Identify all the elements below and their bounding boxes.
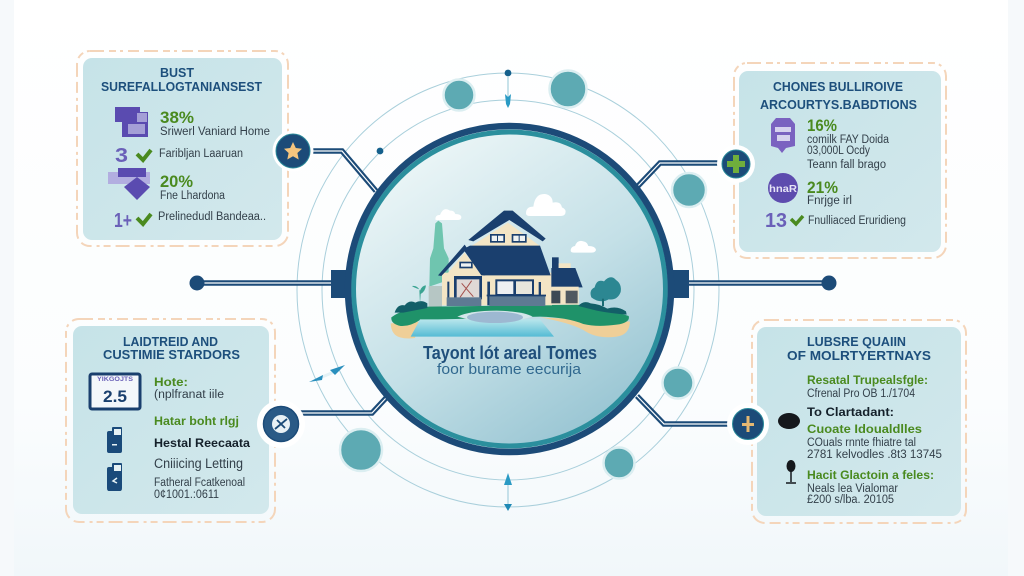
connector: bottom-right panel to hub: [637, 396, 731, 424]
icon: monitor with 2.5: 2.5: [103, 387, 127, 406]
text: listing details: Fatheral Fcatkenoal: [154, 477, 245, 489]
central subtitle: foor burame eecurija: [437, 361, 582, 378]
panel: top right: [734, 63, 946, 258]
heading: [760, 80, 917, 112]
garage: [551, 257, 583, 305]
panel: bottom left: [66, 319, 275, 522]
orbit node: teal circle bottom right: [604, 448, 634, 478]
list row: 3 with check: 3: [115, 145, 128, 167]
stat: 20%: 20%: [160, 172, 193, 191]
text: third item: [807, 468, 934, 506]
icon: monitor with 2.5: [90, 374, 140, 409]
list row: 3 with check: [115, 145, 243, 167]
stat: 16%: comilk FAY Doida: [807, 134, 890, 146]
front door window: [447, 276, 490, 305]
heading: ARCOURTYS.BABDTIONS: [760, 98, 917, 112]
bushes: [395, 301, 627, 315]
text: third item: Neals lea Vialomar: [807, 483, 898, 495]
central title: Tayont lót areal Tomes: [423, 343, 597, 363]
icon: purple shield: [771, 118, 795, 153]
dormer windows: [459, 234, 527, 268]
cloud left: [435, 209, 461, 220]
orbit node: teal circle right: [672, 173, 706, 207]
icon: black oval: [778, 413, 800, 429]
list row: 13 with check: Fnulliaced Eruridieng: [808, 215, 906, 227]
list row: 13 with check: 13: [765, 210, 787, 232]
text: bold label: To Clartadant:: [807, 405, 894, 419]
list row: 1+ with check: [114, 210, 266, 232]
text: third item: £200 s/lba. 20105: [807, 494, 894, 506]
text: listing details: [154, 456, 245, 501]
water: [411, 319, 554, 337]
text: first item: Cfrenal Pro OB 1./1704: [807, 388, 916, 400]
heading: OF MOLRTYERTNAYS: [787, 349, 931, 363]
pond: [457, 311, 533, 323]
orbit node: teal circle top right: [550, 70, 586, 108]
text: second item: Cuoate Idoualdlles: [807, 422, 922, 436]
list row: 3 with check: Faribljan Laaruan: [159, 148, 243, 160]
icon: green plus node: [717, 145, 755, 183]
icon: purple circle badge: [768, 173, 798, 203]
tree: [591, 277, 621, 306]
plant: [412, 285, 426, 304]
central hub disc: [348, 126, 671, 452]
heading: LUBSRE QUAIIN: [807, 335, 906, 349]
icon: star node: [272, 130, 314, 172]
icon: monitor with 2.5: YIKGOJTS: [97, 377, 133, 383]
orbit node: teal circle bottom left: [340, 429, 382, 471]
text: third item: Hacit Glactoin a feles:: [807, 468, 934, 482]
icon: microphone: [786, 460, 796, 483]
orbit node: teal circle top left: [444, 80, 474, 110]
text: listing details: Cniiicing Letting: [154, 456, 243, 471]
text: green heading: Hatar boht rlgj: [154, 414, 239, 428]
text: second item: [807, 422, 942, 461]
stat: 21%: [807, 178, 852, 207]
icon: navy device two: [107, 463, 122, 491]
stat: 38%: [160, 108, 270, 138]
icon: navy device one: [107, 427, 122, 453]
text: second item: 2781 kelvodles .8t3 13745: [807, 449, 942, 461]
text: note: (nplfranat iile: [154, 389, 224, 401]
stat: 38%: Sriwerl Vaniard Home: [160, 126, 270, 138]
icon: purple document: [115, 107, 148, 137]
text: first item: Resatal Trupealsfgle:: [807, 373, 928, 387]
icon: purple circle badge: hnaR: [769, 184, 798, 195]
heading: CUSTIMIE STARDORS: [103, 348, 240, 362]
panel: bottom right: [752, 320, 966, 523]
text: first item: [807, 373, 928, 400]
connector: bottom-left panel to hub: [298, 398, 386, 413]
heading: [101, 66, 262, 94]
main window: [495, 279, 541, 302]
text: second item: COuals rnnte fhiatre tal: [807, 437, 916, 449]
arrow: lower-left diagonal marker: [309, 365, 345, 382]
icon: gold plus node: [727, 403, 769, 445]
stat: 16%: Teann fall brago: [807, 159, 886, 171]
cloud right: [571, 241, 596, 253]
island grass: [391, 305, 629, 326]
heading: SUREFALLOGTANIANSEST: [101, 80, 262, 94]
heading: BUST: [160, 66, 194, 80]
list row: 13 with check: [765, 210, 906, 232]
arrow: top vertical marker: [505, 70, 511, 108]
arrow: bottom vertical marker: [504, 473, 512, 511]
text: note: [154, 375, 224, 401]
panel: top left: [77, 51, 288, 246]
heading: [103, 335, 240, 362]
right horizontal connector with end dot: [672, 270, 836, 298]
left horizontal connector with end dot: [190, 270, 348, 298]
orbit rings: [297, 73, 719, 507]
connector: top-left panel to hub: [309, 151, 376, 191]
list row: 1+ with check: 1+: [114, 210, 132, 232]
icon: purple badge: [108, 168, 150, 200]
porch: [447, 295, 546, 306]
stat: 16%: 16%: [807, 116, 837, 135]
stat: 20%: [160, 172, 226, 202]
stat: 38%: 38%: [160, 108, 194, 127]
heading: [787, 335, 931, 363]
heading: CHONES BULLIROIVE: [773, 80, 903, 94]
stat: 21%: Fnrjge irl: [807, 195, 852, 207]
island sand: [391, 317, 630, 339]
marker: orbit dot: [377, 148, 383, 154]
orbit node: teal circle lower right: [662, 368, 694, 398]
central title: [423, 343, 597, 378]
connector: top-right panel to hub: [638, 163, 722, 186]
stat: 21%: 21%: [807, 178, 838, 197]
icon: compass node: [257, 400, 305, 448]
list row: 1+ with check: Prelinedudl Bandeaa..: [158, 211, 266, 223]
stat: 16%: 03,000L Ocdy: [807, 145, 870, 157]
cloud top: [526, 194, 566, 216]
illustration: house on island: [391, 194, 630, 339]
heading: LAIDTREID AND: [123, 335, 218, 349]
text: note: Hote:: [154, 375, 188, 389]
house: [438, 211, 583, 306]
text: listing details: 0¢1001.:0611: [154, 489, 219, 501]
stat: 16%: [807, 116, 890, 171]
tower: [427, 221, 452, 319]
text: bold label: Hestal Reecaata: [154, 436, 250, 450]
stat: 20%: Fne Lhardona: [160, 190, 226, 202]
